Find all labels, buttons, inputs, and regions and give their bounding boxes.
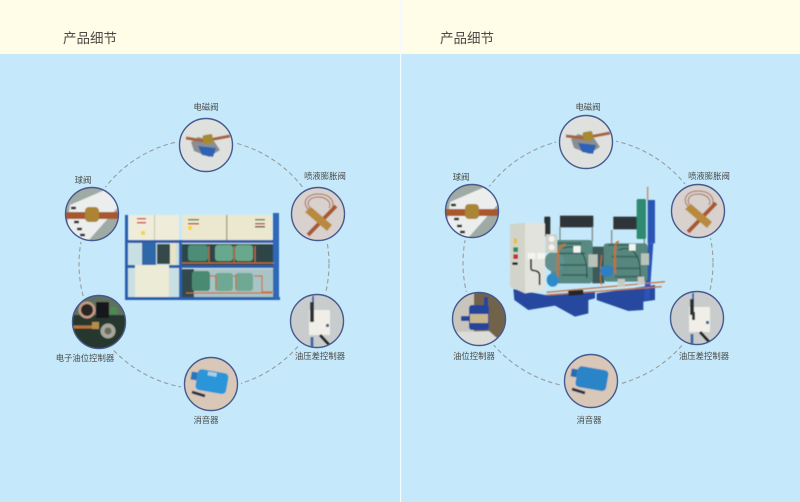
- machine: compressor skid: [510, 187, 665, 317]
- title: right: 产品细节: [440, 31, 494, 46]
- icon: muffler: [562, 354, 619, 408]
- label: oil pressure differential controller: 油压差控制器: [679, 351, 730, 361]
- icon: muffler: [181, 354, 241, 414]
- label: oil level controller: 油位控制器: [453, 351, 496, 361]
- label: solenoid valve: 电磁阀: [575, 102, 601, 112]
- icon: electronic oil level controller: [72, 294, 126, 350]
- title: left: 产品细节: [63, 31, 117, 46]
- icon: expansion valve: [670, 184, 726, 238]
- header band: [0, 0, 800, 54]
- icon: solenoid valve: [178, 118, 234, 172]
- label: oil pressure differential controller: 油压差控制器: [295, 351, 346, 361]
- label: electronic oil level controller: 电子油位控制器: [56, 353, 115, 363]
- dashed ring: [463, 138, 713, 388]
- label: expansion valve: 喷液膨胀阀: [304, 171, 346, 181]
- icon: oil level controller: [452, 292, 506, 346]
- icon: oil pressure differential controller: [290, 294, 344, 348]
- icon: ball valve: [64, 186, 120, 242]
- label: ball valve: 球阀: [453, 172, 469, 182]
- panel: left diagram: [56, 102, 348, 425]
- label: muffler: 消音器: [193, 415, 219, 425]
- icon: oil pressure differential controller: [670, 290, 724, 346]
- dashed ring: [79, 139, 329, 389]
- label: expansion valve: 喷液膨胀阀: [688, 171, 730, 181]
- label: muffler: 消音器: [576, 415, 602, 425]
- label: solenoid valve: 电磁阀: [193, 102, 219, 112]
- machine: rack unit: [125, 213, 280, 300]
- panel: right diagram: [442, 102, 730, 425]
- icon: solenoid valve: [556, 112, 616, 172]
- icon: expansion valve: [290, 186, 346, 242]
- icon: ball valve: [444, 184, 500, 240]
- label: ball valve: 球阀: [75, 175, 91, 185]
